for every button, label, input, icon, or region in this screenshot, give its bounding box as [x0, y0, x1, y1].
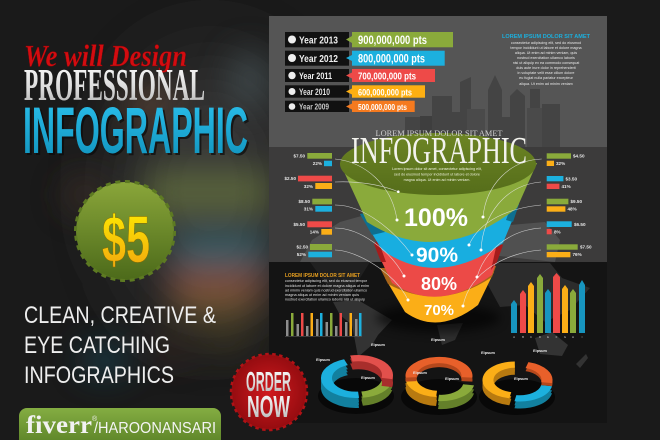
left stat bars: $7.50 — [294, 154, 305, 158]
donut chart 1 — [318, 355, 394, 414]
row 2012: 800,000,000 pts — [358, 54, 425, 66]
funnel: rim — [340, 133, 536, 195]
axis letters: E — [547, 335, 549, 339]
small bar chart — [285, 313, 362, 336]
left stat bars: 32% — [304, 184, 313, 189]
right stat bars: 8% — [554, 230, 561, 234]
top right text block: in voluptate velit esse cillum dolore — [518, 71, 574, 75]
axis letters: G — [564, 335, 566, 339]
left stat bars: $2.50 — [296, 244, 308, 250]
infographic canvas: INFOGRAPHIC — [23, 93, 248, 167]
year ranking bars — [285, 32, 453, 112]
right stat bars: $4.50 — [573, 154, 585, 158]
donut labels: Eipsum — [361, 376, 375, 380]
left stat bars — [284, 153, 332, 257]
axis letters: I — [582, 335, 583, 339]
value 70%: 70% — [424, 302, 454, 319]
top right text block: nostrud exercitation ullamco laboris — [517, 56, 575, 60]
order now badge — [231, 354, 307, 430]
row 2012: Year 2012 — [299, 53, 338, 65]
lower left text block: consectetur adipiscing elit, sed do eiusmod tempor — [285, 279, 368, 283]
value 100%: 100% — [404, 204, 468, 232]
funnel caption: magna aliqua. Ut enim ad minim veniam. — [404, 178, 470, 182]
donut chart 2 — [401, 359, 477, 415]
right stat bars: $9.50 — [570, 199, 582, 204]
city skyline — [405, 75, 560, 147]
heading: infographic — [23, 93, 250, 169]
left stat bars: 31% — [304, 206, 313, 212]
order now badge: ORDER — [246, 366, 291, 397]
value 80%: 80% — [421, 274, 457, 294]
donut labels: Eipsum — [413, 371, 427, 375]
price badge — [76, 182, 174, 280]
axis letters: H — [572, 335, 574, 339]
donut labels: Eipsum — [445, 377, 459, 381]
row 2009: Year 2009 — [299, 102, 329, 112]
tagline: EYE CATCHING — [24, 332, 170, 359]
funnel — [340, 133, 537, 332]
axis letters — [513, 335, 583, 339]
axis letters: A — [513, 335, 515, 339]
infographic canvas: INFOGRAPHIC — [25, 95, 250, 169]
row 2013 — [285, 32, 453, 47]
poster title — [351, 128, 527, 172]
row 2010: 600,000,000 pts — [358, 88, 412, 98]
top right text block: aliqua. Ut enim ad minim veniam, quis — [515, 51, 577, 55]
donut labels — [316, 338, 547, 381]
funnel: green layer — [340, 163, 537, 242]
lower left text block — [285, 273, 369, 302]
donut labels: Eipsum — [431, 338, 445, 342]
tagline: INFOGRAPHICS — [24, 362, 174, 389]
row 2013: 900,000,000 pts — [358, 35, 427, 47]
right stat bars — [547, 153, 592, 257]
row 2013: Year 2013 — [299, 34, 338, 46]
lower left text block: magna aliqua ut enim ad minim veniam quis — [285, 293, 359, 297]
lower left text block: incididunt ut labore et dolore magna aliqua ut enim — [285, 284, 369, 288]
funnel caption: Lorem ipsum dolor sit amet, consectetur adipiscing elit, — [392, 167, 482, 171]
fiverr button: ® — [92, 415, 98, 423]
row 2010 — [285, 85, 425, 98]
top right text block: nisi ut aliquip ex ea commodo consequat — [513, 61, 579, 65]
arrow bar chart — [511, 273, 585, 339]
right stat bars: 32% — [556, 161, 565, 166]
lower left text block: ad minim veniam quis nostrud exercitation ullamco — [285, 288, 367, 292]
funnel caption: sed do eiusmod tempor incididunt ut labore et dolore — [394, 172, 480, 176]
top right text block: eu fugiat nulla pariatur excepteur — [519, 76, 574, 80]
poster title: LOREM IPSUM DOLOR SIT AMET — [376, 128, 503, 138]
donut labels: Eipsum — [533, 349, 547, 353]
left stat bars: $8.50 — [298, 199, 310, 204]
donut chart 3 — [479, 361, 555, 415]
axis letters: B — [522, 335, 524, 339]
funnel caption — [392, 167, 482, 182]
top right text block: consectetur adipiscing elit, sed do eiusmod — [511, 41, 581, 45]
value 90%: 90% — [416, 244, 458, 267]
right stat bars: 76% — [572, 252, 582, 257]
username: /HAROONANSARI — [94, 420, 216, 437]
callout lines — [335, 159, 542, 306]
left stat bars: $5.50 — [294, 222, 305, 227]
lower left text block: nostrud exercitation ullamco laboris nisi ut aliquip — [285, 298, 365, 302]
right stat bars: $6.50 — [574, 222, 586, 227]
top right text block: aliqua. Ut enim ad minim veniam — [519, 82, 573, 86]
funnel: red layer — [374, 240, 503, 297]
right stat bars: $7.50 — [580, 244, 592, 250]
top right text block: duis aute irure dolor in reprehenderit — [516, 66, 576, 70]
donut labels: Eipsum — [481, 351, 495, 355]
axis letters: D — [539, 335, 541, 339]
donut labels: Eipsum — [514, 377, 528, 381]
left stat bars: $2.50 — [284, 176, 296, 181]
left stat bars: 14% — [310, 230, 319, 234]
heading: professional: PROFESSIONAL — [24, 60, 205, 110]
world map — [300, 215, 590, 368]
axis letters: C — [530, 335, 532, 339]
right stat bars: 41% — [562, 184, 571, 189]
donut labels: Eipsum — [371, 343, 385, 347]
poster title: INFOGRAPHIC — [351, 130, 527, 172]
heading: we will design: We will Design — [24, 38, 187, 73]
poster — [269, 16, 607, 423]
row 2012 — [285, 51, 445, 66]
top right text block: LOREM IPSUM DOLOR SIT AMET — [502, 34, 590, 40]
lower left text block: LOREM IPSUM DOLOR SIT AMET — [285, 273, 360, 279]
row 2009 — [285, 101, 415, 112]
funnel: blue layer — [360, 204, 519, 268]
left stat bars: 52% — [297, 252, 306, 257]
funnel: yellow layer — [380, 266, 496, 322]
donut labels: Eipsum — [316, 358, 330, 362]
order now badge: NOW — [247, 389, 290, 424]
right stat bars: 48% — [568, 206, 577, 212]
fiverr button — [19, 408, 221, 440]
axis letters: F — [556, 335, 558, 339]
row 2011: 700,000,000 pts — [358, 72, 416, 82]
row 2009: 500,000,000 pts — [358, 102, 407, 112]
right stat bars: $3.50 — [566, 176, 577, 182]
row 2011 — [285, 69, 435, 82]
callout dots — [396, 190, 484, 308]
fiverr logo: fiverr — [26, 412, 92, 439]
tagline: CLEAN, CREATIVE & — [24, 302, 216, 329]
row 2011: Year 2011 — [299, 71, 333, 82]
left stat bars: 22% — [313, 161, 322, 166]
tagline — [24, 302, 216, 389]
row 2010: Year 2010 — [299, 87, 330, 97]
top right text block: tempor incididunt ut labore et dolore magna — [510, 46, 583, 50]
top right text block — [502, 34, 590, 86]
price text: $5 — [102, 202, 150, 276]
